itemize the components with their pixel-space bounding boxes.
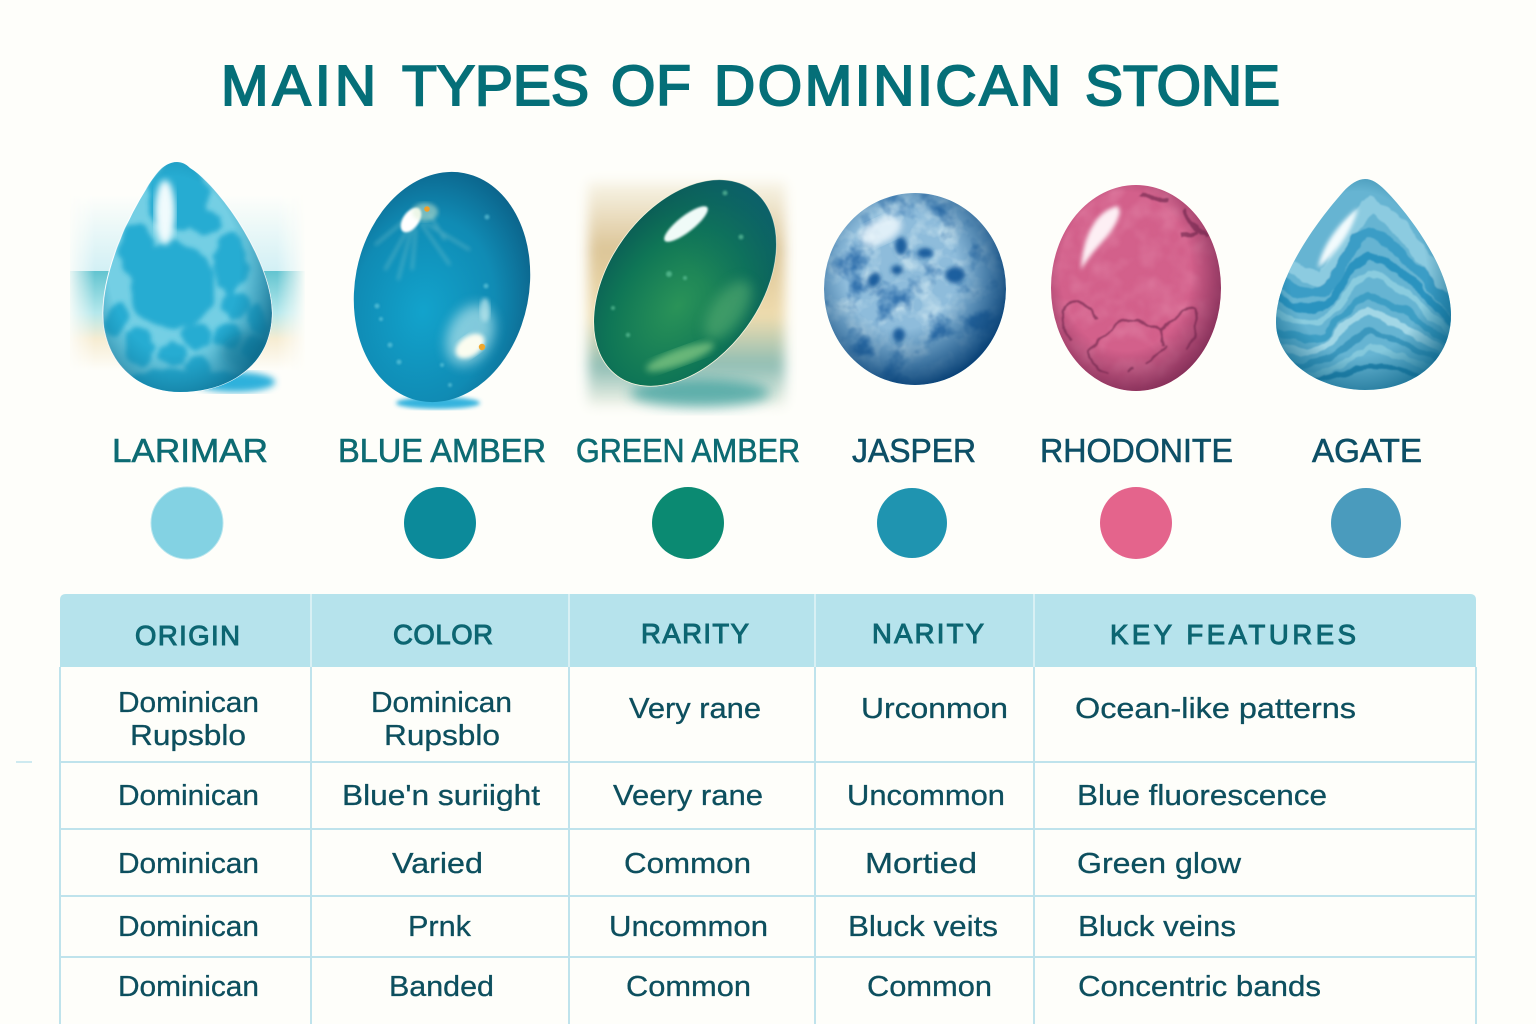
stone names <box>112 432 1422 469</box>
row 1: Dominican <box>118 687 259 719</box>
stone names: JASPER <box>852 432 976 469</box>
row 1: Very rane <box>629 693 761 725</box>
row 2: Blue fluorescence <box>1077 780 1327 812</box>
row 2: Veery rane <box>613 780 763 812</box>
stone names: AGATE <box>1312 432 1422 469</box>
stone names: BLUE AMBER <box>338 432 546 469</box>
row 1: Rupsblo <box>384 720 500 752</box>
table header: ORIGIN <box>135 620 240 651</box>
table <box>60 594 1476 1024</box>
title: OF <box>611 54 691 118</box>
table header: COLOR <box>393 619 493 650</box>
row 5: Banded <box>389 971 494 1003</box>
row 2: Uncommon <box>847 780 1005 812</box>
row 2 <box>118 780 1327 812</box>
row 3: Mortied <box>865 848 977 880</box>
title: TYPES <box>402 54 589 118</box>
stone: green amber <box>580 179 793 416</box>
table header: RARITY <box>641 618 749 649</box>
row 3: Varied <box>392 848 483 880</box>
row 5: Common <box>867 971 992 1003</box>
row 5 <box>118 971 1321 1003</box>
title <box>221 54 1280 118</box>
table header <box>60 594 1476 667</box>
stone names: LARIMAR <box>112 432 268 469</box>
row 4: Bluck veins <box>1078 911 1236 943</box>
title: DOMINICAN <box>714 54 1061 118</box>
stone: blue amber <box>354 172 530 410</box>
row 3 <box>118 848 1242 880</box>
row 4: Prnk <box>408 911 472 943</box>
row 4: Dominican <box>118 911 259 943</box>
row 1: Ocean-like patterns <box>1075 693 1356 725</box>
row 3: Green glow <box>1077 848 1242 880</box>
stone: rhodonite <box>1051 185 1221 391</box>
row 1: Rupsblo <box>130 720 246 752</box>
title: STONE <box>1085 54 1280 118</box>
row 5: Common <box>626 971 751 1003</box>
row 4: Uncommon <box>609 911 768 943</box>
stone names: RHODONITE <box>1040 432 1233 469</box>
stone: larimar <box>70 160 305 406</box>
table header: KEY FEATURES <box>1110 619 1356 650</box>
table grid <box>60 667 1476 1024</box>
row 5: Concentric bands <box>1078 971 1321 1003</box>
table header: NARITY <box>872 618 984 649</box>
row 3: Dominican <box>118 848 259 880</box>
colour swatches <box>151 487 1401 559</box>
row 1 <box>118 687 1356 752</box>
stone: agate <box>1276 179 1451 390</box>
row 5: Dominican <box>118 971 259 1003</box>
row 1: Dominican <box>371 687 512 719</box>
row 4: Bluck veits <box>848 911 998 943</box>
stone names: GREEN AMBER <box>576 432 800 469</box>
stone: jasper <box>824 193 1006 385</box>
row 1: Urconmon <box>861 693 1008 725</box>
title: MAIN <box>221 54 376 118</box>
row 2: Dominican <box>118 780 259 812</box>
row 3: Common <box>624 848 751 880</box>
row 2: Blue'n suriight <box>342 780 540 812</box>
row 4 <box>118 911 1236 943</box>
